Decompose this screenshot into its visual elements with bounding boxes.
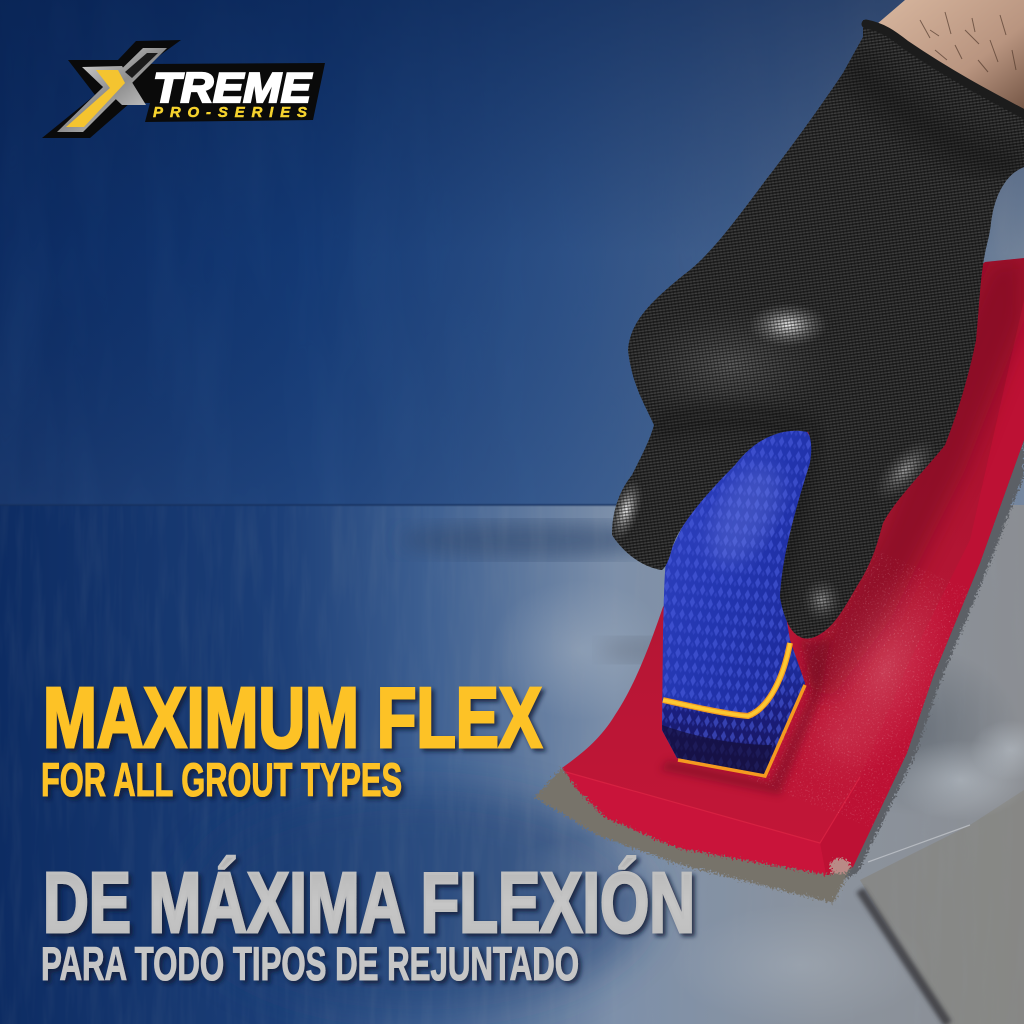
heading: Maximum Flex: MAXIMUM FLEX bbox=[43, 671, 542, 766]
background: blue wall bbox=[0, 0, 1024, 506]
grout-covered red trowel float bbox=[535, 258, 1024, 903]
logo: Xtreme Pro-Series bbox=[42, 40, 325, 138]
logo word TREME: TREME bbox=[153, 64, 313, 111]
subheading: For all grout types: FOR ALL GROUT TYPES bbox=[41, 753, 402, 806]
trowel shadow beside hand bbox=[800, 258, 1024, 700]
handle body bbox=[662, 420, 812, 775]
thumb highlight bbox=[612, 482, 641, 538]
knit texture over highlights bbox=[600, 10, 1024, 650]
trowel bevel band bbox=[850, 301, 1024, 868]
finger highlights bbox=[806, 582, 839, 618]
blue ergonomic handle bbox=[662, 430, 812, 778]
handle yellow stripe bbox=[663, 643, 790, 716]
heading: De máxima flexión: DE MÁXIMA FLEXIÓN bbox=[43, 856, 695, 951]
handle lower section bbox=[662, 643, 805, 775]
palm fold shadow bbox=[653, 415, 810, 610]
black work glove bbox=[600, 10, 1024, 650]
trowel red body bbox=[562, 258, 1024, 880]
glove fill bbox=[612, 20, 1024, 639]
logo silver X bbox=[57, 48, 167, 132]
knuckle highlight bbox=[752, 305, 824, 345]
right corner grout patch bbox=[830, 858, 850, 874]
trowel side edge bbox=[833, 430, 1024, 885]
background: tiled floor bbox=[0, 505, 1024, 1024]
trowel grout edge bbox=[535, 768, 852, 903]
cuff band shading bbox=[846, 60, 1024, 168]
glove cuff rim bbox=[866, 24, 1024, 114]
subheading: Para todo tipos de rejuntado: PARA TODO TIPOS DE REJUNTADO bbox=[41, 937, 579, 990]
shadow under handle bbox=[660, 640, 830, 795]
forearm bbox=[870, 0, 1024, 120]
logo X inner cut bbox=[125, 53, 158, 78]
logo black backing bbox=[42, 40, 325, 138]
logo word PRO-SERIES: PRO-SERIES bbox=[153, 104, 307, 121]
logo yellow X stripe bbox=[66, 70, 125, 127]
handle texture bbox=[662, 431, 811, 774]
glove knuckle sheen bbox=[657, 323, 805, 405]
handle base yellow edge bbox=[678, 685, 805, 776]
trowel bottom bevel bbox=[567, 773, 756, 826]
plaster dust on trowel bbox=[834, 594, 937, 744]
